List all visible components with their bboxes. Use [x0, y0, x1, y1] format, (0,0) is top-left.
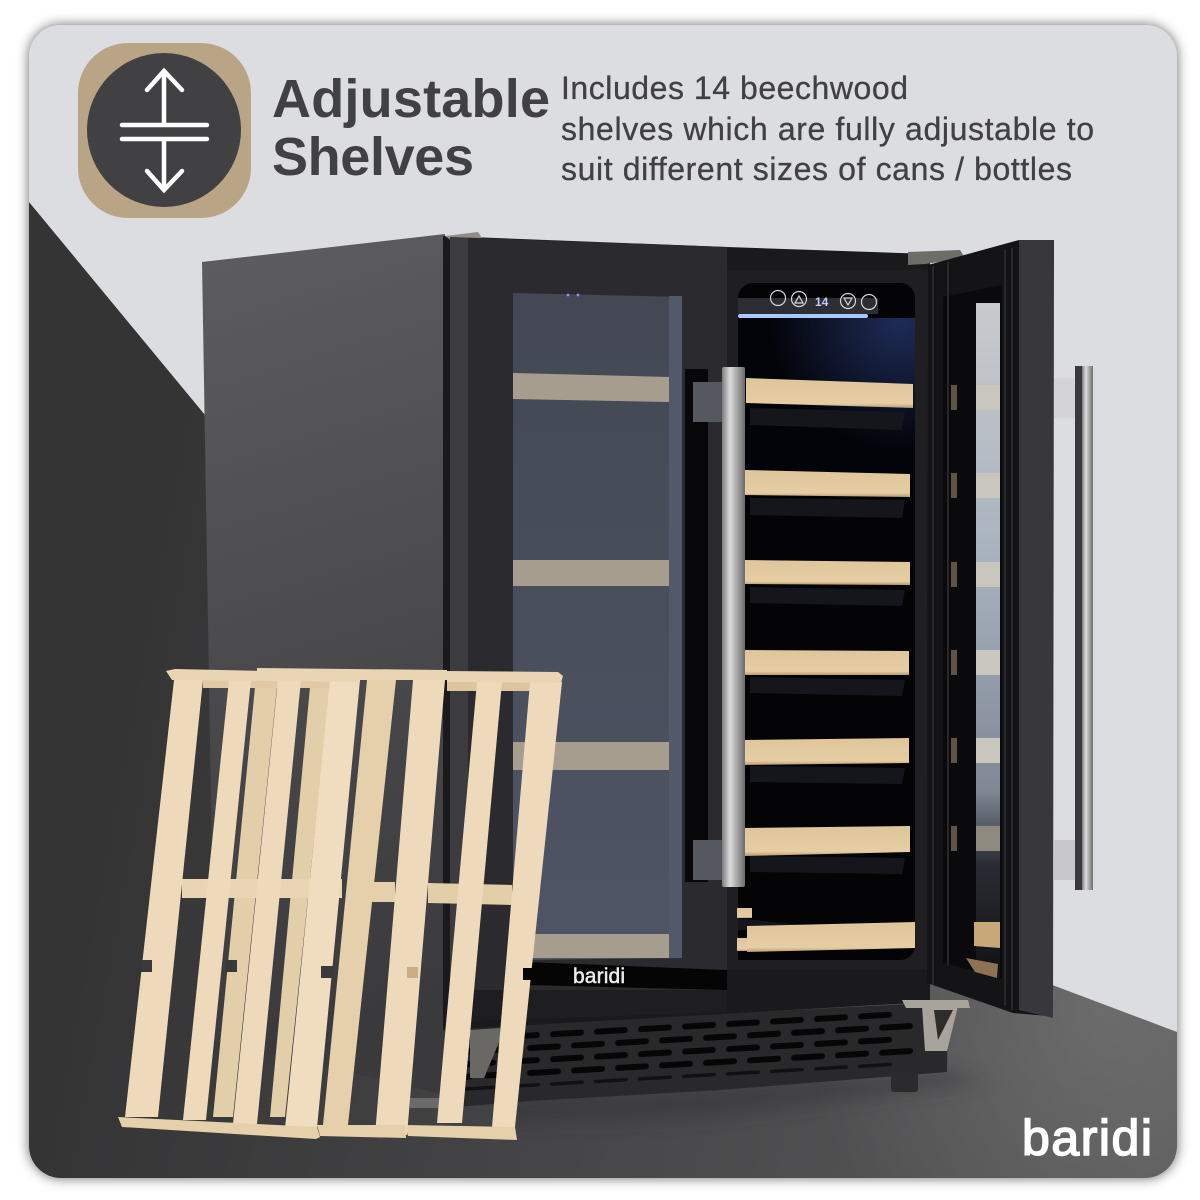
- loose beechwood shelves: [118, 668, 563, 1140]
- shelf rails: [738, 408, 905, 930]
- hinge: left base: [470, 1028, 500, 1078]
- door lines: [933, 248, 1012, 1010]
- door logo strip: [527, 962, 727, 990]
- wooden shelves: [737, 378, 915, 952]
- right door handle: [1054, 366, 1093, 890]
- description text: shelves which are fully adjustable to: [561, 111, 1094, 147]
- description text: suit different sizes of cans / bottles: [561, 151, 1072, 187]
- hinge: bottom: [902, 1000, 970, 1051]
- icon: adjustable shelves badge: [78, 43, 251, 218]
- left door handle: [685, 367, 745, 887]
- wine cooler: [202, 232, 1093, 1108]
- door glass: [513, 293, 682, 960]
- front shelf: [118, 669, 360, 1139]
- door logo: baridi: [573, 965, 625, 988]
- shelf notch on door strip: [523, 968, 537, 980]
- heading: Shelves: [272, 127, 474, 187]
- shelf square hole: [407, 967, 418, 978]
- open right door: [927, 240, 1054, 1018]
- left door: [450, 237, 727, 1022]
- shelves seen through door: [976, 385, 1000, 851]
- middle shelf: [213, 668, 447, 1138]
- hinge: top left: [445, 232, 482, 241]
- interior: [727, 270, 930, 970]
- rear shelf: [405, 671, 563, 1140]
- control panel: 14: [815, 295, 829, 309]
- description text: Includes 14 beechwood: [561, 70, 908, 106]
- dark wall and floor: [29, 202, 1177, 1178]
- heading: Adjustable: [272, 69, 550, 129]
- hinge: top right: [908, 250, 965, 265]
- door glass: [976, 303, 1000, 980]
- shelf notches: [141, 960, 333, 978]
- cabinet front: [443, 236, 930, 1030]
- ventilated base: [410, 1002, 948, 1108]
- side panel: [202, 234, 445, 1095]
- brand logo: baridi: [1022, 1110, 1152, 1166]
- shelves seen through glass: [513, 373, 669, 958]
- control panel: [738, 290, 878, 318]
